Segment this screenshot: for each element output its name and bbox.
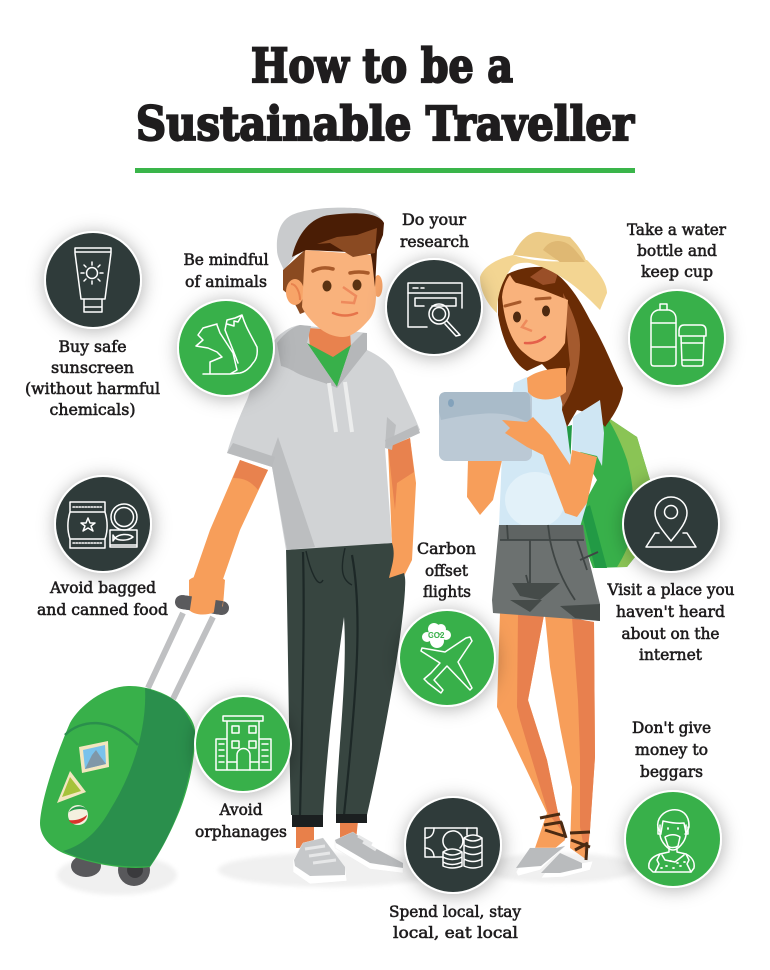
face <box>302 250 376 337</box>
label: sunscreen <box>25 337 160 419</box>
label: carbon offset: offset <box>425 561 469 580</box>
sticker: triangle <box>57 771 86 803</box>
icon circle: water bottle <box>628 289 726 387</box>
woman's hair back <box>498 267 623 427</box>
label: orphanages <box>195 800 287 841</box>
hoodie cuffs <box>227 425 420 467</box>
icon circle: animals <box>177 299 275 397</box>
man <box>182 208 420 884</box>
label: food <box>37 578 168 619</box>
label: animals: Be mindful <box>184 250 268 269</box>
label: spend local: local, eat local <box>393 923 518 942</box>
woman's hair highlight <box>560 293 580 407</box>
label: carbon offset: Carbon <box>417 539 476 558</box>
label: spend local: Spend local, stay <box>389 902 521 921</box>
tablet <box>439 392 532 461</box>
label: sunscreen: Buy safe <box>58 337 126 356</box>
label: orphanages: Avoid <box>219 800 262 819</box>
sandals <box>540 814 590 850</box>
icon: squirrel <box>196 315 257 374</box>
label: carbon offset <box>417 539 476 601</box>
label: food: and canned food <box>37 600 168 619</box>
ears <box>286 275 382 305</box>
woman's shoes <box>516 846 593 878</box>
label: sunscreen: (without harmful <box>25 379 160 398</box>
label: research: Do your <box>402 210 466 229</box>
label: water bottle: Take a water <box>627 220 726 239</box>
icon: man with beard <box>649 810 694 872</box>
label: research <box>400 210 469 251</box>
hoodie <box>227 325 420 550</box>
label: water bottle: bottle and <box>637 241 717 260</box>
woman's mouth <box>525 337 545 343</box>
label: beggars: beggars <box>640 762 703 781</box>
woman's neck <box>527 368 566 400</box>
woman's eyes <box>513 306 550 322</box>
eyebrows <box>313 268 368 273</box>
label: water bottle <box>627 220 726 281</box>
t-shirt <box>307 343 351 387</box>
label: water bottle: keep cup <box>641 262 713 281</box>
shirt <box>499 377 587 528</box>
woman's face <box>502 275 568 362</box>
icon: map pin <box>646 497 696 547</box>
mouth <box>333 313 357 316</box>
left shoe <box>293 838 347 884</box>
icon circle: money <box>404 796 502 894</box>
label: animals: of animals <box>185 272 267 291</box>
icon circle: beggars <box>624 790 722 888</box>
icon circle: sunscreen <box>44 231 142 329</box>
woman's nose <box>522 320 532 331</box>
label: sunscreen: chemicals) <box>50 400 136 419</box>
label: beggars: money to <box>635 740 708 759</box>
ground shadows <box>57 853 638 895</box>
drawstrings <box>329 382 352 432</box>
woman's legs <box>497 612 595 860</box>
title: How to be a <box>251 39 513 94</box>
label: location: about on the <box>622 624 720 643</box>
icon circle: research <box>385 258 483 356</box>
icon circle: carbon offset <box>398 609 496 707</box>
man's head <box>277 208 384 337</box>
hair back <box>283 250 310 314</box>
icon circle: food <box>54 475 152 573</box>
neck <box>308 328 351 358</box>
backpack <box>565 417 650 568</box>
title <box>136 39 635 152</box>
icon: building <box>216 716 271 770</box>
hat <box>480 232 607 313</box>
label: carbon offset: flights <box>423 582 471 601</box>
suitcase <box>40 602 222 886</box>
label: location: Visit a place you <box>607 580 734 599</box>
title underline <box>135 168 635 173</box>
icon circle: location <box>622 475 720 573</box>
man's left arm and hand <box>182 460 268 615</box>
cap <box>277 208 383 270</box>
sticker: mountain <box>79 741 109 773</box>
man's legs and shoes <box>286 438 416 884</box>
label: orphanages: orphanages <box>195 822 287 841</box>
label: location: internet <box>639 645 703 664</box>
suitcase body <box>40 686 195 868</box>
label: research: research <box>400 232 469 251</box>
icon: plane with cloud: CO2 <box>428 631 445 640</box>
label: location: haven't heard <box>616 602 725 621</box>
woman's eyebrows <box>505 298 550 306</box>
icon circle: orphanages <box>194 695 292 793</box>
icon: bottle and cup <box>651 304 706 366</box>
label: location <box>607 580 734 664</box>
woman's left arm <box>467 460 502 515</box>
label: sunscreen: sunscreen <box>51 358 134 377</box>
label: spend local <box>389 902 521 942</box>
man's right arm <box>388 438 416 578</box>
trousers <box>286 543 405 815</box>
label: food: Avoid bagged <box>49 578 156 597</box>
icon: banknote and coins <box>425 828 482 868</box>
label: animals <box>184 250 268 291</box>
trouser cuffs <box>292 814 367 827</box>
woman <box>439 232 650 878</box>
nose <box>341 287 356 303</box>
label: beggars: Don't give <box>632 718 711 737</box>
shorts <box>492 525 600 621</box>
hair <box>292 213 384 287</box>
woman's right arm and hand <box>502 417 597 517</box>
hood <box>277 325 367 388</box>
suitcase handle <box>148 602 222 699</box>
eyes <box>322 280 362 292</box>
icon: browser and magnifier <box>408 283 462 336</box>
suitcase wheels <box>71 854 150 886</box>
sticker: round <box>68 805 88 825</box>
icon: bag and can <box>68 502 137 548</box>
woman's sleeve <box>572 400 604 466</box>
right shoe <box>335 832 403 873</box>
label: beggars <box>632 718 711 781</box>
icon: sunscreen tube <box>75 248 111 312</box>
title: Sustainable Traveller <box>136 97 635 152</box>
